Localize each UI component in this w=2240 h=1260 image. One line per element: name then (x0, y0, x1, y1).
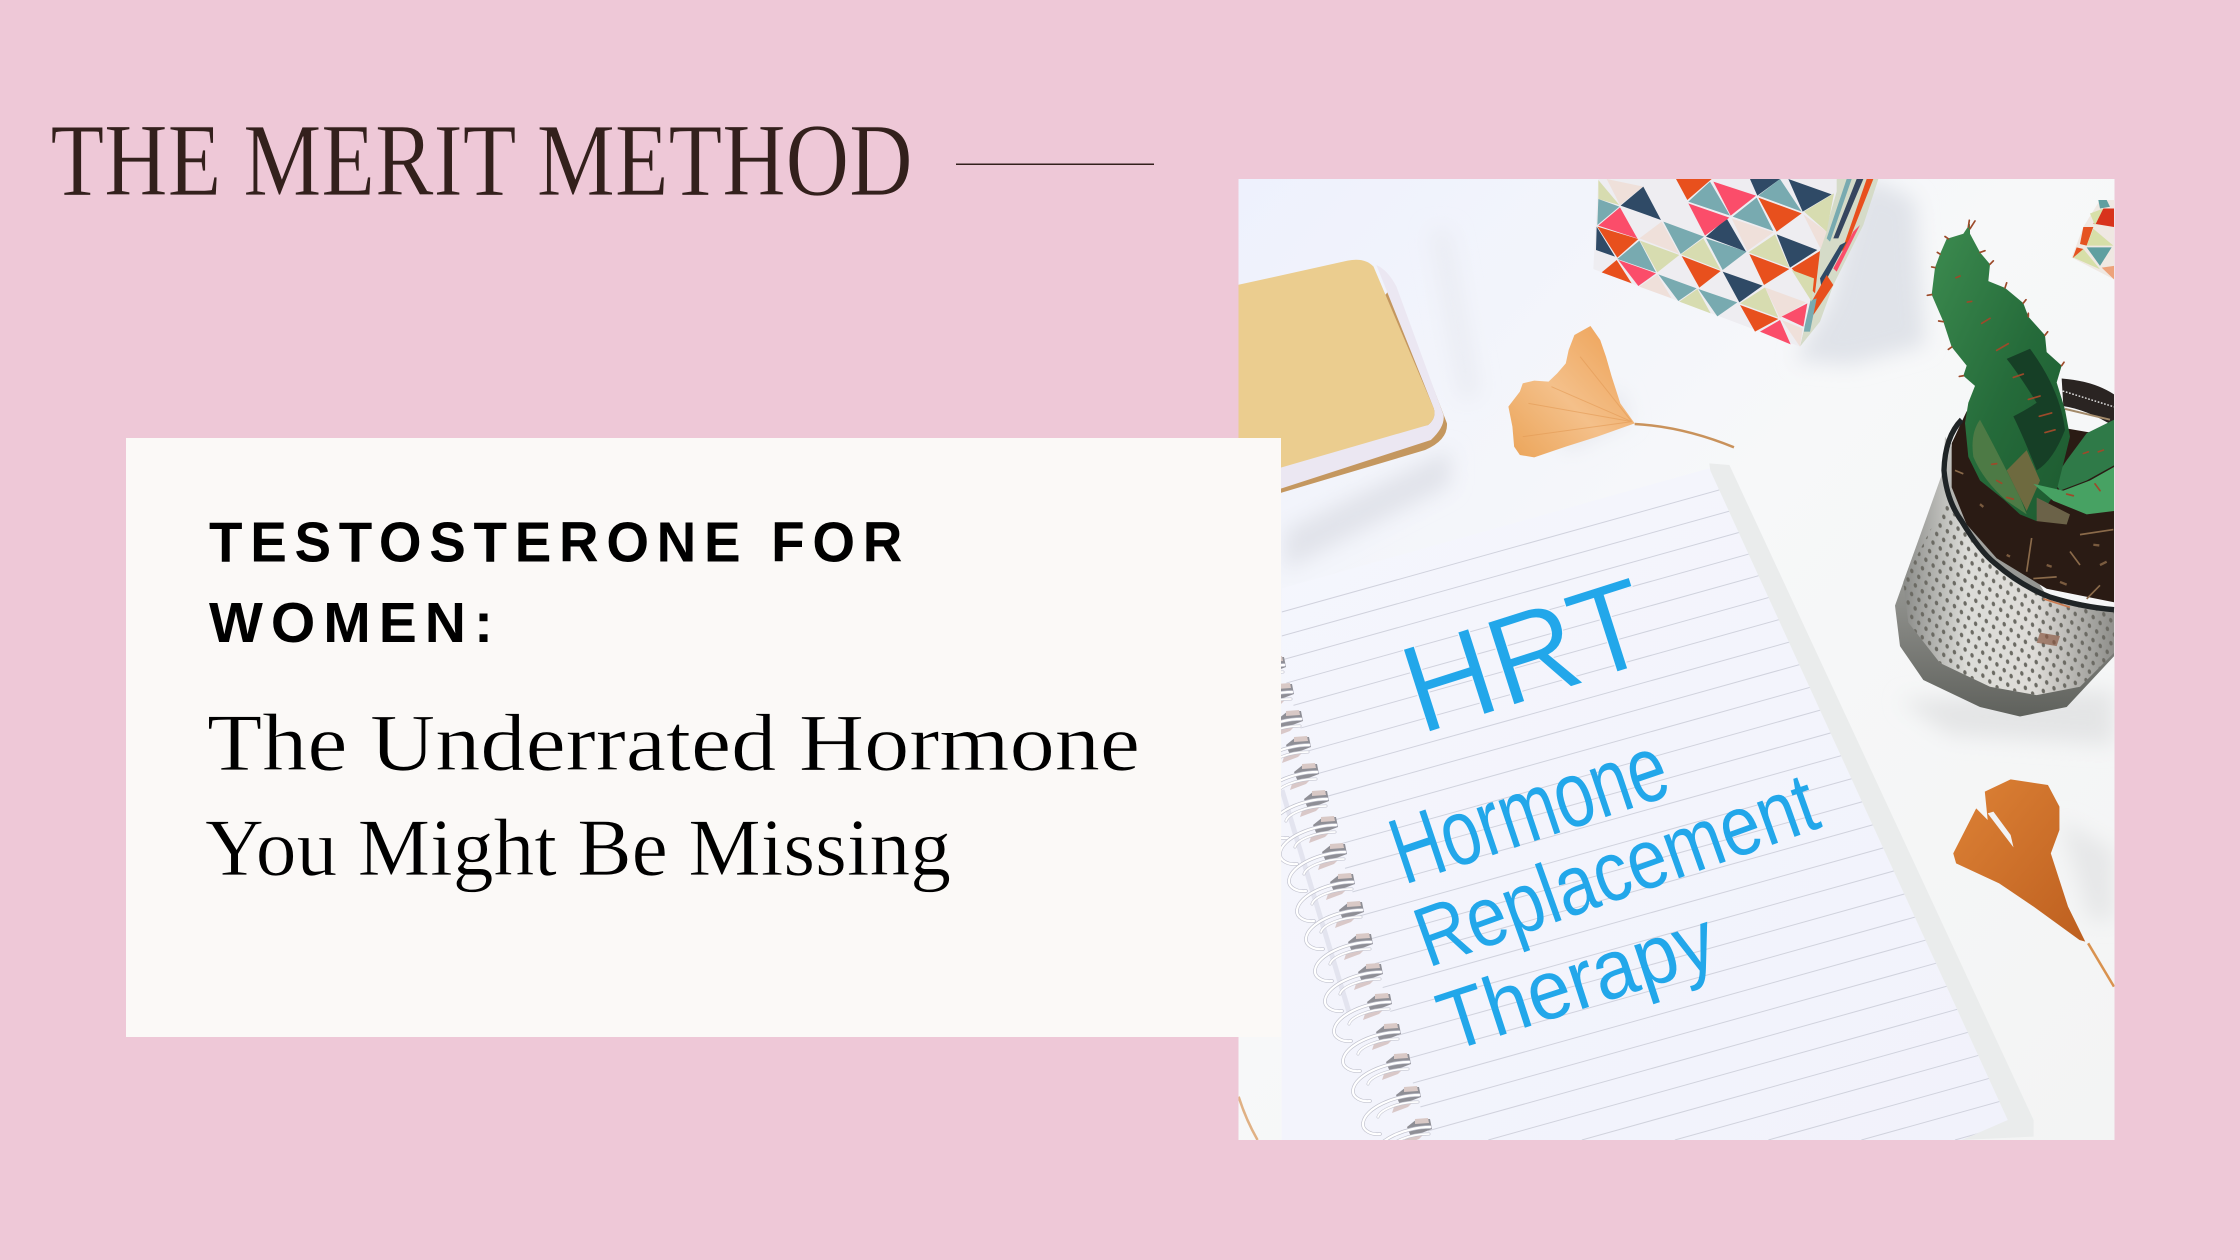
ginkgo leaf: light orange (1508, 326, 1734, 457)
subtitle: You Might Be Missing (205, 802, 951, 893)
spiral notebook (1282, 402, 2034, 1140)
patterned box (1593, 179, 1878, 347)
photo: HRT notebook on a desk (1228, 179, 2114, 1166)
second box corner (2072, 200, 2114, 279)
desk shadows (1285, 180, 2114, 920)
handwriting: HRT: HRT (1385, 550, 1666, 761)
metal plant pot (1895, 378, 2114, 716)
notebook rules (1282, 490, 2000, 1140)
heading: testosterone for women: TESTOSTERONE FOR (209, 510, 910, 574)
subtitle: The Underrated Hormone (207, 697, 1140, 788)
cactus: spines (1927, 220, 2103, 499)
handwriting: Therapy: Therapy (1427, 892, 1727, 1069)
subtitle (205, 697, 1140, 893)
cactus (1927, 220, 2114, 524)
tan pocket notebook (1230, 260, 1447, 507)
handwriting: Hormone: Hormone (1377, 714, 1680, 904)
heading: testosterone for women: WOMEN: (209, 591, 501, 655)
spiral binding (1281, 656, 1432, 1140)
title rule (956, 164, 1154, 165)
panel: article title card (126, 438, 1281, 1037)
box side face (1800, 179, 1878, 347)
cactus: main stem (1932, 224, 2070, 521)
heading: testosterone for women (209, 510, 910, 655)
handwriting: Replacement: Replacement (1402, 755, 1830, 986)
box front face (1593, 179, 1837, 347)
brand title: THE MERIT METHOD (50, 103, 912, 218)
ginkgo leaf: dark orange (1239, 779, 2114, 1140)
desk surface (1238, 179, 2114, 1140)
cactus: side arm (2053, 420, 2114, 491)
handwriting on notebook (1388, 578, 1823, 1046)
